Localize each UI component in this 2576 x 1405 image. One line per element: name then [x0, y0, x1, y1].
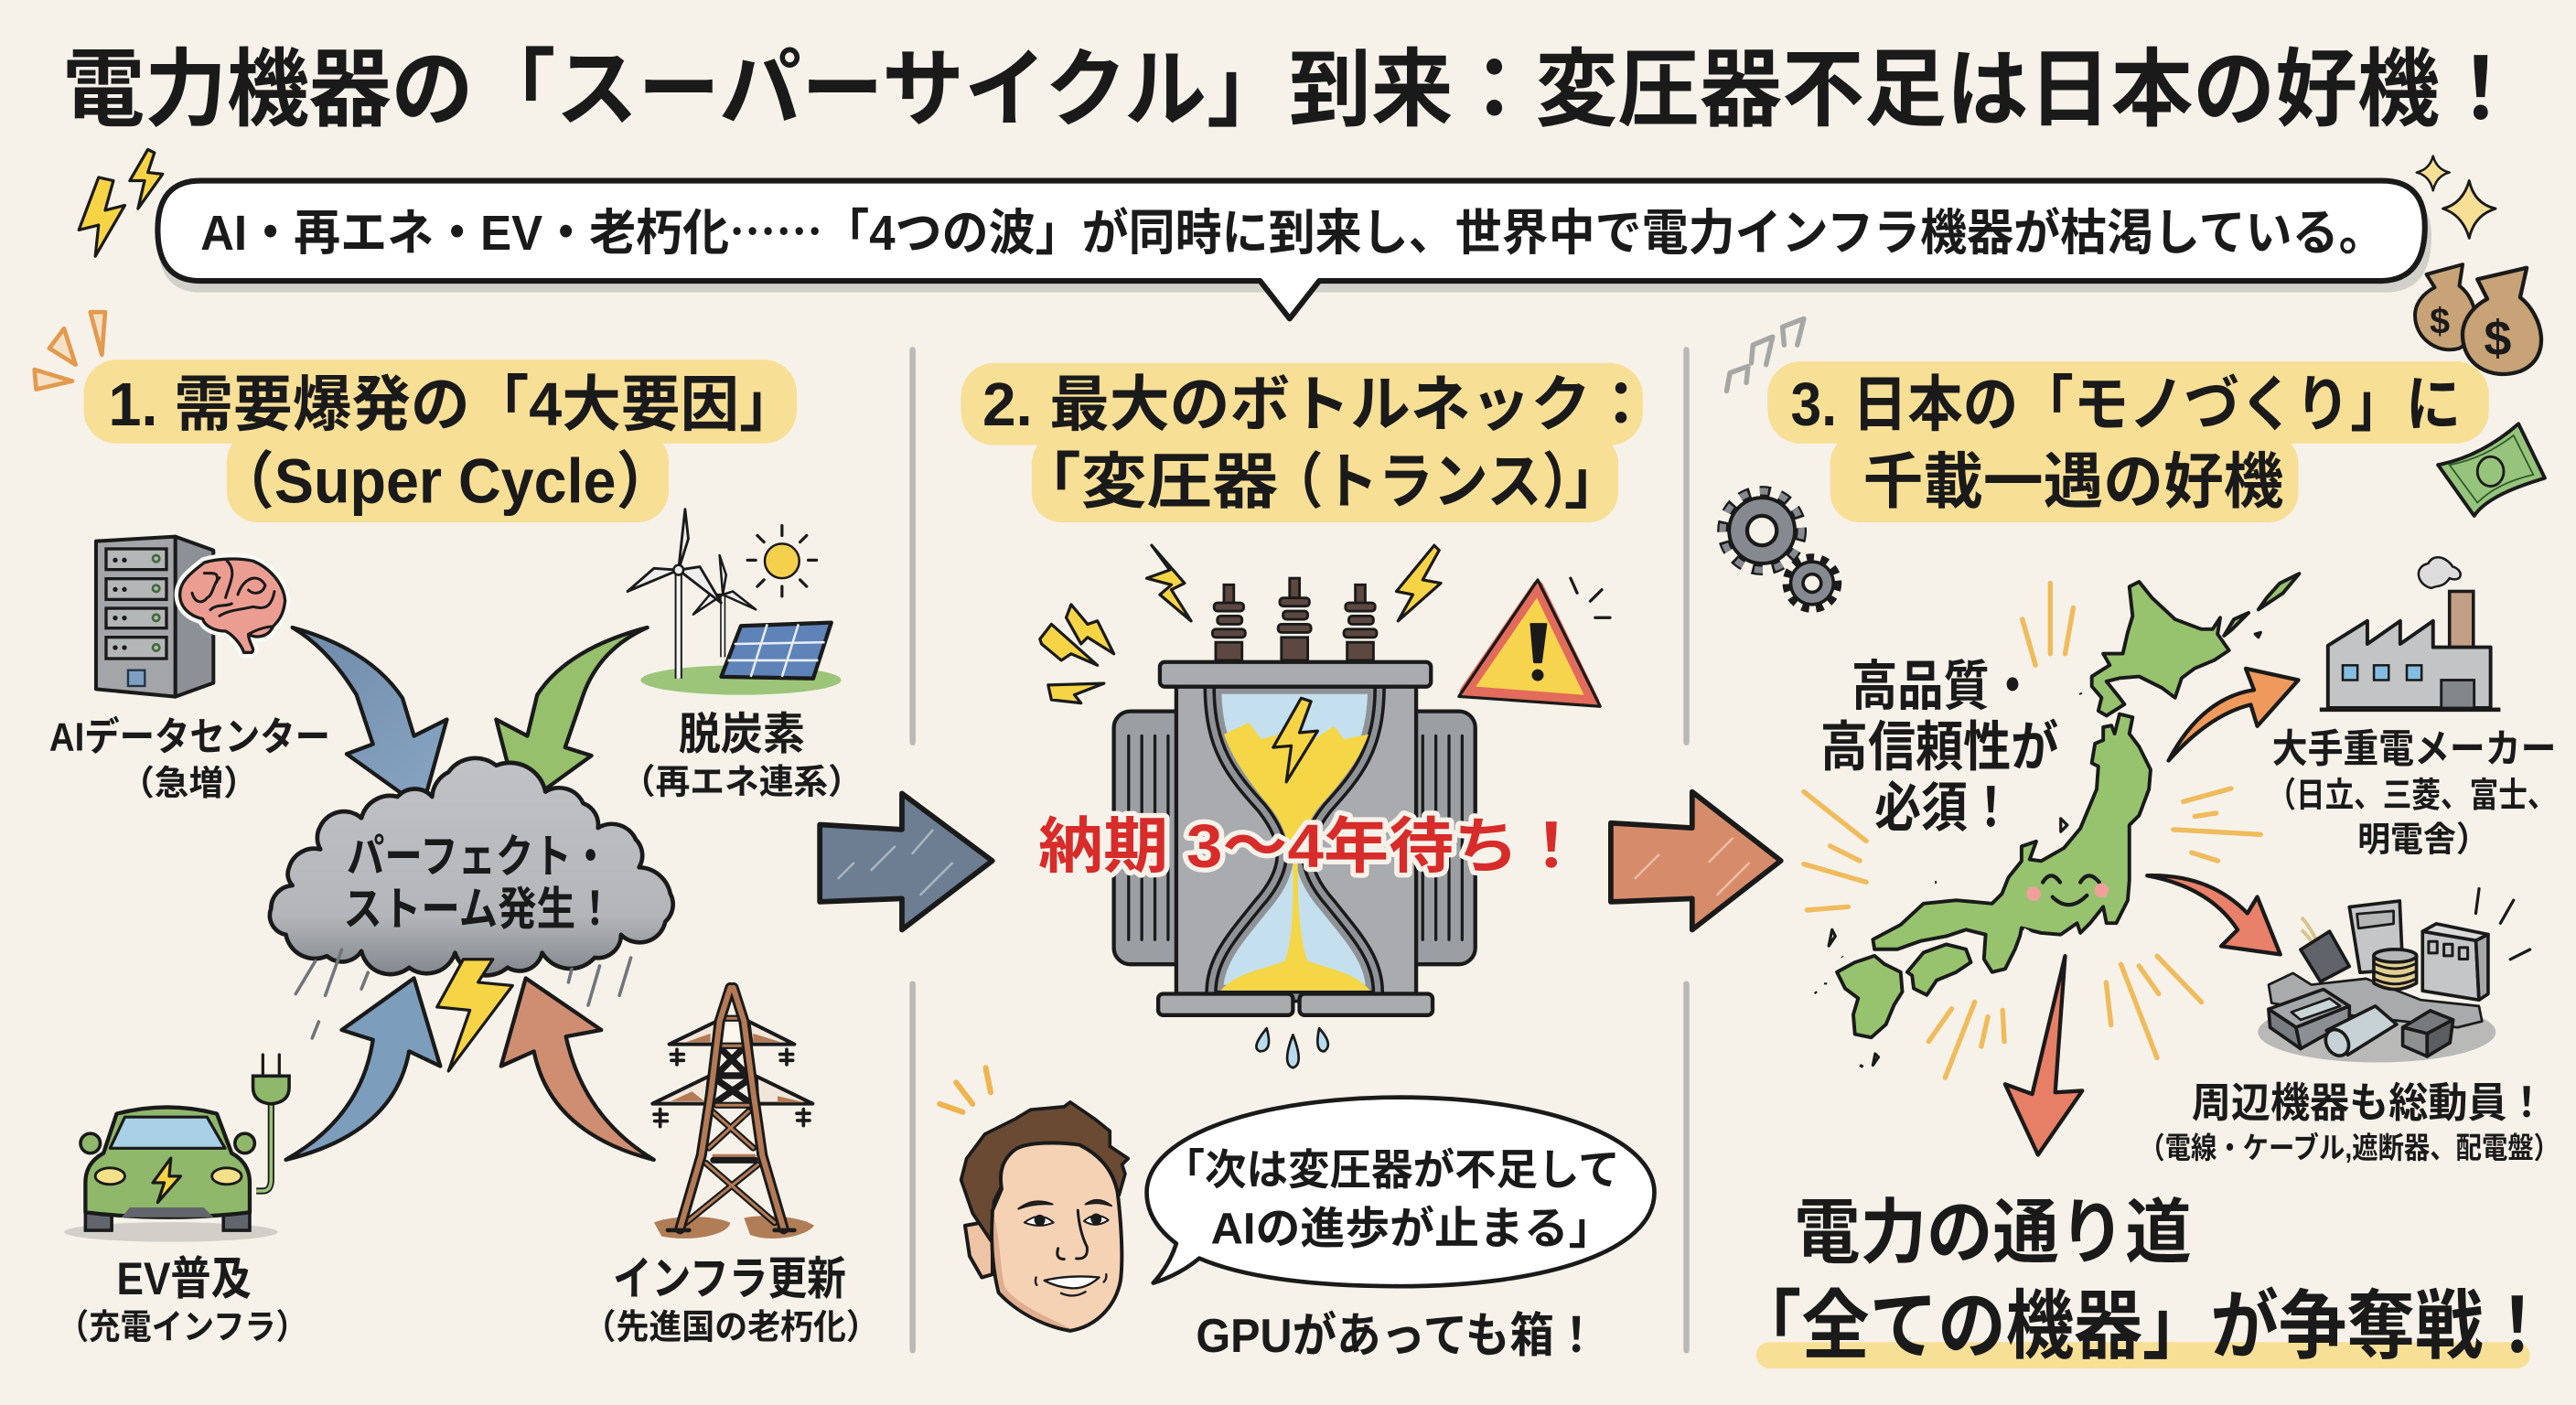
label: peripheral equipment: 周辺機器も総動員！: [2192, 1079, 2547, 1126]
icon: sparkles top right: [2417, 156, 2496, 238]
icon: factory: [2320, 557, 2500, 710]
label: AI data center: （急増）: [120, 764, 258, 802]
section heading 3: [1767, 361, 2489, 522]
icon: money bags: $: [2484, 311, 2511, 366]
label: decarbonization: 脱炭素: [679, 710, 805, 759]
arrow: section 2 to section 3: [1611, 792, 1781, 929]
icon: money bags: $: [2430, 302, 2450, 342]
icon: lightning bolts top left: [79, 149, 163, 256]
arrow: decarbonization to storm: [496, 627, 648, 809]
section heading 1: （Super Cycle）: [215, 447, 675, 517]
arrow: section 1 to section 2: [820, 793, 993, 929]
section heading 1: [84, 359, 799, 522]
quote speech bubble: 「次は変圧器が不足して: [1164, 1146, 1620, 1194]
conclusion callout: 電力の通り道: [1794, 1194, 2192, 1272]
icon: warning triangle: [1459, 578, 1610, 706]
label: infrastructure renewal: インフラ更新: [613, 1252, 846, 1304]
text: GPU caption: GPUがあっても箱！: [1196, 1310, 1598, 1363]
section heading 2: [961, 363, 1651, 522]
icon: server rack: [96, 537, 213, 697]
panel: demand factors: [35, 312, 879, 1346]
label: EV: （充電インフラ）: [58, 1308, 307, 1346]
icon: peripheral equipment pile: [2258, 889, 2530, 1063]
panel: transformer bottleneck: [939, 363, 1654, 1363]
icon: storm lightning and rain: [295, 949, 631, 1071]
label: EV: [58, 1252, 307, 1346]
quote speech bubble: AIの進歩が止まる」: [1211, 1204, 1614, 1253]
section heading 2: 」: [1564, 449, 1625, 517]
text: high quality: 高品質・: [1852, 655, 2035, 716]
label: infrastructure renewal: [584, 1252, 879, 1346]
label: infrastructure renewal: （先進国の老朽化）: [584, 1308, 879, 1346]
arrow: Japan to conclusion: [2005, 956, 2082, 1154]
label: major heavy electric makers: [2267, 727, 2556, 858]
icon: rays around Japan: [1804, 584, 2260, 1078]
icon: portrait face: [961, 1102, 1128, 1331]
subtitle speech bubble: AI・再エネ・EV・老朽化……「4つの波」が同時に到来し、世界中で電力インフラ機器が枯渇している。: [200, 193, 2386, 264]
label: AI data center: AIデータセンター: [49, 715, 330, 760]
section heading 2: 2. 最大のボトルネック：: [982, 371, 1651, 439]
icon: rusty transmission tower: [652, 988, 814, 1239]
cloud: perfect storm: パーフェクト・: [347, 831, 609, 883]
conclusion callout: [1733, 1194, 2551, 1368]
delivery time callout: 納期 3〜4年待ち！: [1038, 813, 1583, 881]
label: major heavy electric makers: 明電舎）: [2357, 820, 2489, 858]
section heading 1: 1. 需要爆発の「4大要因」: [109, 371, 799, 439]
icon: gears: [1723, 491, 1838, 608]
icon: money bags: [2415, 264, 2541, 374]
subtitle speech bubble: [157, 181, 2431, 318]
quote speech bubble: [1147, 1098, 1654, 1286]
text: high quality: [1820, 655, 2058, 838]
arrow: Japan to peripheral equipment: [2147, 875, 2281, 954]
label: decarbonization: （再エネ連系）: [621, 762, 863, 800]
label: AI data center: [49, 715, 330, 802]
section heading 2: （トランス）: [1268, 449, 1597, 517]
label: decarbonization: [621, 710, 863, 800]
icon: gray burst ticks: [1727, 318, 1804, 391]
arrow: EV to storm: [285, 978, 440, 1160]
icon: orange ticks by portrait: [939, 1067, 991, 1112]
arrow: AI to storm: [293, 627, 446, 809]
section heading 3: 千載一遇の好機: [1863, 449, 2283, 517]
text: high quality: 必須！: [1874, 777, 2014, 838]
section heading 3: 3. 日本の「モノづくり」に: [1791, 371, 2461, 439]
icon: banknote: [2438, 424, 2545, 516]
icon: bushings: [1212, 578, 1377, 660]
panel: Japan manufacturing opportunity: [1723, 318, 2560, 1368]
section heading 2: 「変圧器: [1015, 449, 1278, 517]
icon: lightning bolts around transformer: [1040, 545, 1441, 703]
arrow: Japan to factory: [2169, 669, 2298, 760]
icon: orange burst ticks: [35, 312, 105, 390]
title: 電力機器の「スーパーサイクル」到来：変圧器不足は日本の好機！: [62, 41, 2522, 137]
icon: EV car with plug: [64, 1055, 289, 1242]
icon: wind turbines and solar panel: [628, 509, 842, 695]
label: EV: EV普及: [117, 1252, 252, 1304]
cloud: perfect storm: ストーム発生！: [343, 883, 615, 935]
icon: transformer hourglass: [1114, 578, 1476, 1015]
arrow: infrastructure to storm: [501, 978, 654, 1160]
text: high quality: 高信頼性が: [1820, 716, 2058, 778]
map: Japan: [1815, 574, 2299, 1067]
icon: brain: [180, 559, 285, 652]
cloud: perfect storm: [270, 758, 673, 975]
icon: water drops: [1256, 1028, 1328, 1067]
label: peripheral equipment: [2139, 1079, 2560, 1164]
